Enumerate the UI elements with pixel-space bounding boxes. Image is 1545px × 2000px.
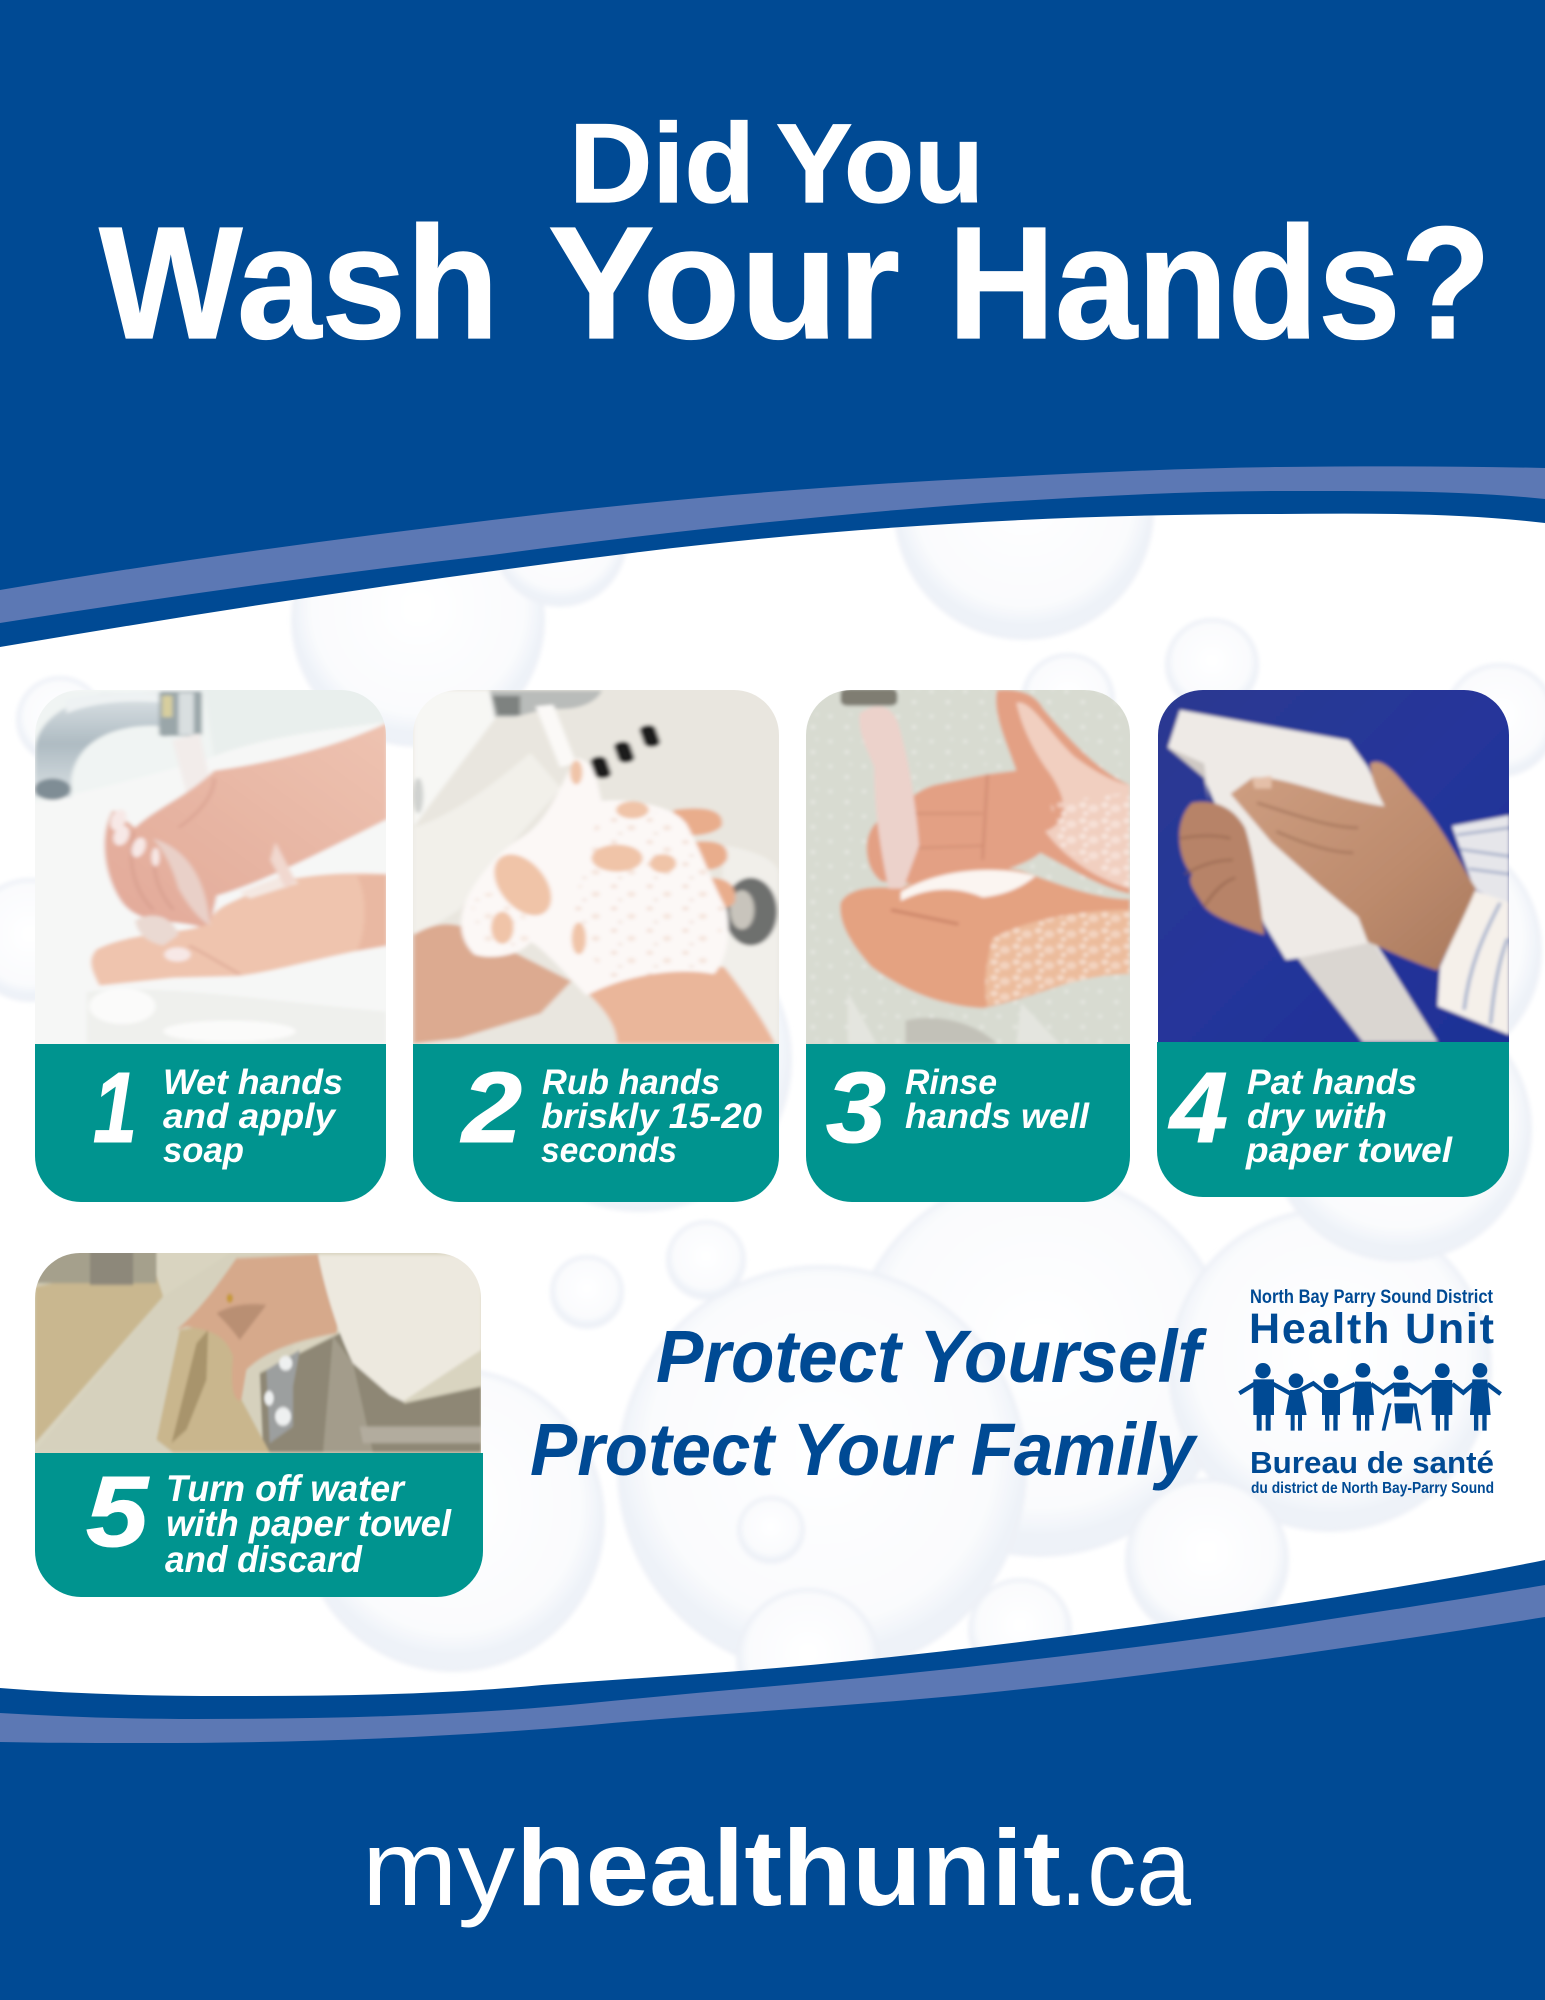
title: Hands? [948, 193, 1491, 372]
panel: step 4 [1146, 681, 1522, 1197]
tagline [530, 1315, 1207, 1491]
caption band [35, 1453, 483, 1597]
panel: step 3 [800, 681, 1137, 1202]
caption band [806, 1044, 1130, 1202]
panel: step 1 [20, 681, 398, 1202]
title: You [776, 101, 984, 226]
photo: turning off tap with paper towel [30, 1247, 486, 1456]
step text [165, 1468, 452, 1580]
step number: 5 [86, 1456, 150, 1568]
logo: Health Unit [1239, 1287, 1501, 1497]
step text [541, 1063, 763, 1170]
footer url: my [362, 1807, 515, 1928]
step text: Wet hands [163, 1063, 343, 1102]
header: blue wave band [0, 0, 1545, 647]
step number: 2 [460, 1052, 522, 1164]
step text: soap [163, 1131, 244, 1170]
tagline: Protect Your Family [530, 1408, 1199, 1491]
step text [1245, 1063, 1453, 1170]
tagline: Protect Yourself [656, 1315, 1207, 1398]
title: Wash [99, 193, 499, 372]
step text: and apply [163, 1097, 337, 1136]
logo text: Health Unit: Health Unit [1249, 1305, 1494, 1353]
step text: Rinse [905, 1063, 997, 1102]
photo: drying hands with paper towel [1158, 690, 1509, 1042]
title: Your [548, 193, 900, 372]
title [99, 101, 1491, 372]
logo text: Bureau de santé: Bureau de santé [1250, 1445, 1494, 1480]
step number: 1 [93, 1052, 137, 1164]
caption band [35, 1044, 386, 1202]
logo text: North Bay Parry Sound District: North Bay Parry Sound District [1250, 1287, 1494, 1308]
step text: with paper towel [166, 1503, 452, 1544]
panel: step 2 [408, 681, 785, 1202]
step text: dry with [1247, 1097, 1387, 1136]
step text: Turn off water [166, 1468, 407, 1509]
step number: 4 [1168, 1052, 1228, 1164]
step text: briskly 15-20 [541, 1097, 763, 1136]
logo icon: row of people holding hands [1239, 1363, 1501, 1431]
background: soap bubbles [0, 382, 1545, 1730]
step text: Pat hands [1247, 1063, 1417, 1102]
panel: step 5 [30, 1247, 486, 1597]
footer: blue wave band [0, 1560, 1545, 2000]
photo: rinsing hands [800, 681, 1137, 1053]
step text: seconds [541, 1131, 677, 1170]
footer url: healthunit [516, 1807, 1061, 1928]
photo: wetting hands under faucet [35, 690, 386, 1044]
step text: Rub hands [542, 1063, 720, 1102]
step text [905, 1063, 1090, 1136]
step text [163, 1063, 343, 1170]
caption band [1157, 1042, 1509, 1197]
photo: soapy hands rubbing [408, 681, 785, 1053]
step text: and discard [165, 1539, 363, 1580]
footer url: .ca [1060, 1807, 1192, 1928]
caption band [413, 1044, 779, 1202]
step text: hands well [905, 1097, 1090, 1136]
step text: paper towel [1245, 1131, 1453, 1170]
title: Did [569, 101, 755, 226]
step number: 3 [826, 1052, 886, 1164]
logo text: du district de North Bay-Parry Sound: du district de North Bay-Parry Sound [1251, 1480, 1494, 1497]
